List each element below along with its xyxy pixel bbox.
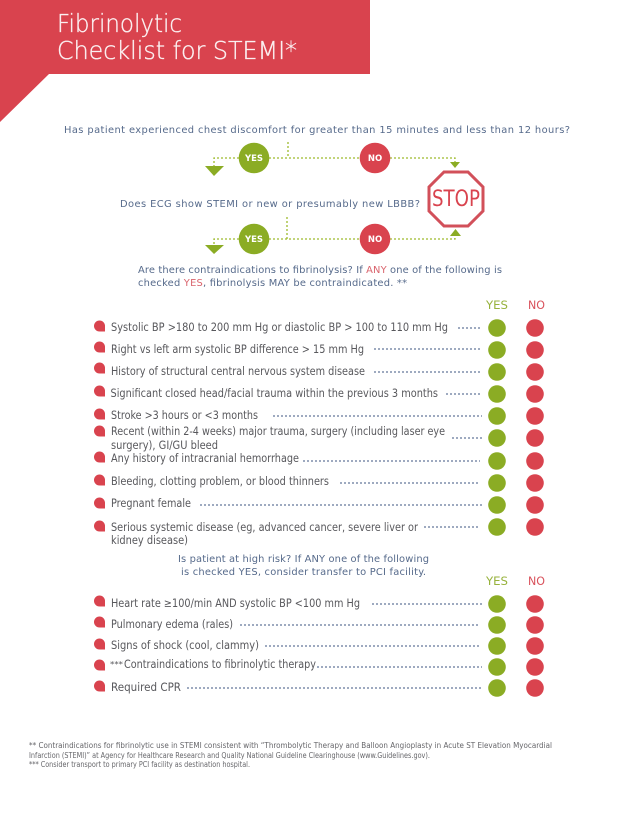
checklist: high risk: [94, 595, 544, 697]
flow row 2: [205, 217, 461, 254]
flow row 1: [205, 142, 460, 176]
footnotes: *** Consider transport to primary PCI facility as destination hospital.: [29, 760, 250, 769]
row: contraindications to therapy: Contraindications to fibrinolytic therapy: [124, 658, 316, 671]
row: systemic disease: [94, 518, 544, 547]
row: pulmonary edema: Pulmonary edema (rales): [111, 618, 233, 631]
question: ECG: Does ECG show STEMI or new or presumably new LBBB?: [120, 199, 420, 210]
row: systolic BP: Systolic BP >180 to 200 mm Hg or diastolic BP > 100 to 110 mm Hg: [111, 321, 448, 334]
row: recent trauma: Recent (within 2-4 weeks) major trauma, surgery (including laser eye: [111, 425, 445, 438]
row: pulmonary edema: [94, 616, 544, 634]
row: head trauma: Significant closed head/facial trauma within the previous 3 months: [110, 387, 438, 400]
yes button: YES: [244, 154, 263, 164]
row: contraindications to therapy: [94, 658, 544, 676]
column headings: contraindications: NO: [528, 298, 545, 312]
column headings: contraindications: YES: [485, 298, 508, 312]
question: high risk: is checked YES, consider transfer to PCI facility.: [181, 567, 426, 578]
column headings: contraindications: [485, 298, 545, 312]
row: recent trauma: surgery), GI/GU bleed: [111, 439, 218, 452]
question: high risk: [178, 554, 429, 578]
row: shock: Signs of shock (cool, clammy): [111, 639, 259, 652]
row: CNS disease: History of structural central nervous system disease: [111, 365, 365, 378]
yes button: YES: [244, 235, 263, 245]
footnotes: ** Contraindications for fibrinolytic use in STEMI consistent with “Thrombolytic Therapy and Balloon Angioplasty in Acute ST Elevation Myocardial: [29, 741, 552, 750]
title: Checklist for STEMI*: [57, 36, 297, 65]
no button: NO: [368, 235, 382, 245]
yes button: [239, 143, 269, 173]
row: CPR: [94, 679, 544, 697]
column headings: high risk: YES: [485, 574, 508, 588]
row: systemic disease: kidney disease): [111, 534, 188, 547]
stop sign: STOP: [432, 187, 480, 212]
row: arm difference: [94, 341, 544, 359]
row: stroke: [94, 407, 544, 425]
row: intracranial hemorrhage: Any history of intracranial hemorrhage: [111, 452, 299, 465]
row: heart rate: [94, 595, 544, 613]
yes button: [239, 224, 269, 254]
row: intracranial hemorrhage: [94, 452, 544, 470]
title: [57, 9, 297, 65]
header banner: [0, 0, 370, 122]
column headings: high risk: NO: [528, 574, 545, 588]
row: arm difference: Right vs left arm systolic BP difference > 15 mm Hg: [111, 343, 364, 356]
question: contraindications: checked YES, fibrinolysis MAY be contraindicated. **: [138, 278, 407, 289]
row: bleeding: [94, 474, 544, 492]
row: pregnant: [94, 496, 544, 514]
column headings: high risk: [485, 574, 545, 588]
row: pregnant: Pregnant female: [111, 497, 191, 510]
stop sign: [429, 172, 483, 226]
row: systolic BP: [94, 319, 544, 337]
row: CNS disease: [94, 362, 544, 381]
no button: [360, 143, 390, 173]
question: high risk: Is patient at high risk? If ANY one of the following: [178, 554, 429, 565]
row: contraindications to therapy: ***: [110, 660, 123, 669]
no button: NO: [368, 154, 382, 164]
row: head trauma: [94, 385, 544, 403]
checklist: contraindications: [94, 319, 544, 547]
question: contraindications: [138, 265, 502, 289]
row: CPR: Required CPR: [111, 681, 181, 694]
row: heart rate: Heart rate ≥100/min AND systolic BP <100 mm Hg: [111, 597, 360, 610]
question: chest discomfort: Has patient experienced chest discomfort for greater than 15 minutes and less than 12 hours?: [64, 125, 570, 136]
row: bleeding: Bleeding, clotting problem, or blood thinners: [111, 475, 329, 488]
row: shock: [94, 637, 544, 655]
row: systemic disease: Serious systemic disease (eg, advanced cancer, severe liver or: [111, 521, 418, 534]
footnotes: [29, 741, 552, 769]
question: contraindications: Are there contraindications to fibrinolysis? If ANY one of the following is: [138, 265, 502, 276]
row: recent trauma: [94, 425, 544, 452]
no button: [360, 224, 390, 254]
row: stroke: Stroke >3 hours or <3 months: [111, 409, 258, 422]
title: Fibrinolytic: [57, 9, 182, 38]
footnotes: Infarction (STEMI)” at Agency for Healthcare Research and Quality National Guideline Clearinghouse (www.Guidelines.gov).: [29, 751, 430, 760]
